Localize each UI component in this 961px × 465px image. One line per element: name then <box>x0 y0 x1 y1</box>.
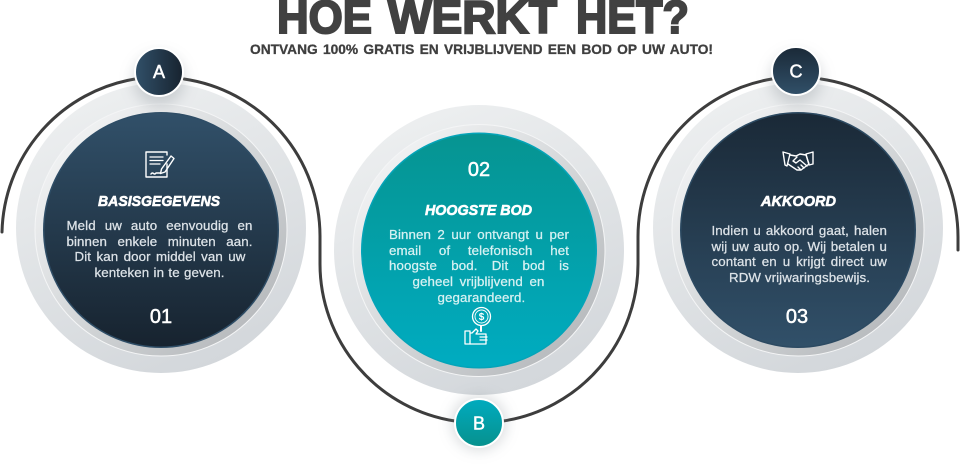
panel: akkoord <box>653 83 943 373</box>
connector line <box>2 79 958 421</box>
body text: email of telefonisch het <box>389 243 569 258</box>
badge B: B <box>473 414 485 434</box>
title <box>277 0 689 43</box>
number: 03 <box>786 306 808 328</box>
body text: hoogste bod. Dit bod is <box>389 258 569 273</box>
icon: document with pen <box>146 152 174 177</box>
subtitle: ONTVANG 100% GRATIS EN VRIJBLIJVEND EEN BOD OP UW AUTO! <box>250 41 713 57</box>
body text <box>700 223 900 289</box>
heading: AKKOORD <box>760 193 836 210</box>
number: 01 <box>150 306 172 328</box>
body text <box>60 218 260 284</box>
body text: Meld uw auto eenvoudig en <box>66 218 252 233</box>
body text <box>380 227 580 309</box>
body text: RDW vrijwaringsbewijs. <box>729 270 870 285</box>
body text: Indien u akkoord gaat, halen <box>712 223 887 238</box>
icon: handshake <box>783 152 813 170</box>
badge B <box>452 396 506 450</box>
body text: wij uw auto op. Wij betalen u <box>712 239 887 254</box>
body text: gegarandeerd. <box>438 290 525 305</box>
body text: Binnen 2 uur ontvangt u per <box>389 227 569 242</box>
badge C: C <box>790 62 802 82</box>
panel: basisgegevens <box>16 83 306 373</box>
number: 02 <box>468 159 490 181</box>
body text: geheel vrijblijvend en <box>412 274 544 289</box>
panel: hoogste bod <box>334 105 624 395</box>
badge C <box>770 47 822 105</box>
body text: binnen enkele minuten aan. <box>66 234 252 249</box>
body text: Dit kan door middel van uw <box>74 249 246 264</box>
badge A <box>133 48 185 106</box>
icon: hand with magnifier and dollar <box>465 308 490 344</box>
heading: HOOGSTE BOD <box>425 202 532 219</box>
badge A: A <box>153 62 165 82</box>
body text: contant en u krijgt direct uw <box>712 254 887 269</box>
heading: BASISGEGEVENS <box>98 193 220 210</box>
body text: kenteken in te geven. <box>94 265 224 280</box>
icon: hand with magnifier and dollar: $ <box>479 312 485 323</box>
